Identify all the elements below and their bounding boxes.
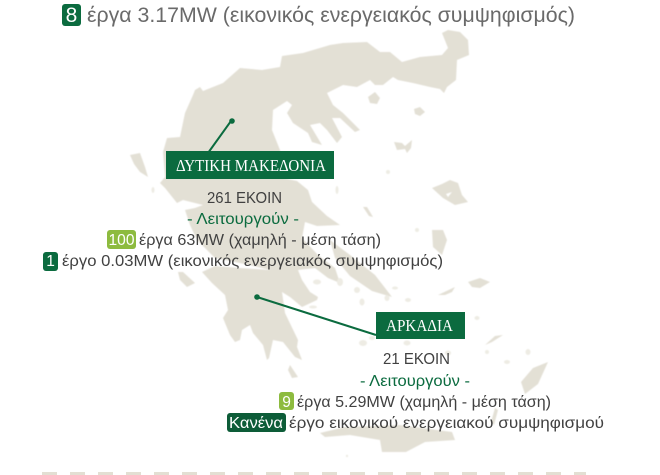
badge: 1: 1 [46, 253, 55, 270]
badge: 1 [43, 252, 58, 271]
badge: 9 [279, 392, 294, 411]
stats: Arcadia: έργο εικονικού ενεργειακού συμψηφισμού [289, 415, 604, 432]
small islands [152, 170, 530, 457]
badge: 9: 9 [282, 394, 291, 411]
stats: Arcadia: 21 ΕΚΟΙΝ [383, 351, 450, 368]
title [62, 4, 575, 27]
badge: 8 [62, 4, 81, 27]
label: Arcadia [376, 312, 465, 339]
label: Western Macedonia [166, 151, 334, 179]
pointer: Arcadia [254, 294, 376, 335]
label: Arcadia: ΑΡΚΑΔΙΑ [386, 316, 454, 335]
stats: Western Macedonia [43, 190, 443, 271]
stats: Western Macedonia: έργα 63MW (χαμηλή - μέση τάση) [139, 232, 381, 249]
map of Greece [130, 30, 548, 457]
badge: 100: 100 [108, 232, 135, 249]
stats: Arcadia: - Λειτουργούν - [360, 373, 470, 390]
stats: Western Macedonia: - Λειτουργούν - [187, 211, 299, 228]
label: Western Macedonia: ΔΥΤΙΚΗ ΜΑΚΕΔΟΝΙΑ [176, 156, 327, 175]
dashed bottom rule [42, 472, 586, 475]
badge: 8: 8 [66, 4, 77, 27]
stats: Arcadia [227, 351, 604, 432]
pointer: Western Macedonia [208, 118, 235, 153]
title text: έργα 3.17MW (εικονικός ενεργειακός συμψηφισμός) [87, 4, 575, 27]
mainland [160, 30, 469, 360]
islands [130, 92, 548, 452]
badge: none: Κανένα [229, 415, 283, 432]
stats: Arcadia: έργα 5.29MW (χαμηλή - μέση τάση) [297, 394, 551, 411]
stats: Western Macedonia: έργο 0.03MW (εικονικός ενεργειακός συμψηφισμός) [62, 253, 443, 270]
stats: Western Macedonia: 261 ΕΚΟΙΝ [207, 190, 282, 207]
